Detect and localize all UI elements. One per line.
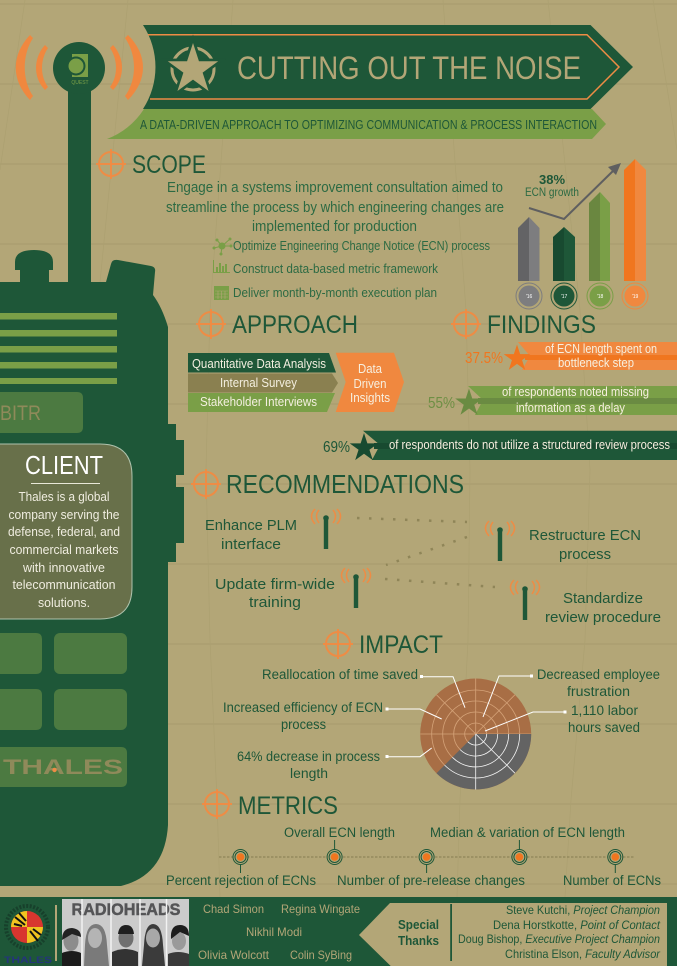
step: internal survey: Internal Survey [220, 375, 297, 390]
recommendation: standardize review [545, 590, 661, 626]
logo: University of Maryland [6, 906, 48, 948]
bar: 2017 [553, 227, 575, 281]
thanks list: Christina Elson, Faculty Advisor [505, 947, 661, 961]
recommendation: update training [215, 576, 335, 611]
label: labor hours: hours saved [568, 720, 640, 735]
heading: metrics: METRICS [238, 792, 338, 820]
recommendation: standardize review: review procedure [545, 609, 661, 626]
antenna head [53, 42, 105, 94]
team members: Olivia Wolcott [198, 948, 270, 962]
team members: Colin SyBing [290, 948, 352, 962]
team name: RADIOHEADS [72, 901, 180, 919]
bar: 2018 [589, 192, 610, 281]
icon: crosshair [202, 789, 232, 819]
growth label [525, 172, 579, 199]
finding: 55%: of respondents noted missing [502, 385, 649, 399]
panel: scope [96, 149, 504, 300]
finding: 37.5%: of ECN length spent on [545, 342, 657, 356]
thanks list: Dena Horstkotte, Point of Contact [493, 918, 661, 932]
panel: client [0, 444, 132, 619]
finding: 55%: information as a delay [516, 401, 626, 415]
thanks heading [398, 917, 439, 948]
title banner [143, 25, 633, 109]
bar: 2016 [518, 217, 540, 281]
banner shape [143, 25, 633, 109]
logo: Thales: THALES [4, 955, 52, 965]
logo: Quest: QUEST [71, 80, 89, 86]
bullet: execution plan: Deliver month-by-month execution plan [233, 286, 437, 300]
icon: antenna 3 [342, 568, 370, 608]
year badges: '18 [597, 294, 603, 300]
recommendation: standardize review: Standardize [563, 590, 643, 607]
year badges: '16 [526, 294, 532, 300]
growth label: ECN growth [525, 187, 579, 199]
metric labels [166, 825, 661, 888]
icon: network [213, 238, 232, 255]
heading: approach: APPROACH [232, 311, 358, 339]
step: stakeholder interviews: Stakeholder Interviews [200, 394, 317, 409]
chevron: data driven insights: Data [358, 361, 383, 376]
recommendation: restructure ECN [529, 527, 641, 563]
bullet: metric framework: Construct data-based metric framework [233, 262, 439, 276]
client heading: CLIENT [25, 450, 103, 480]
step: internal survey [188, 374, 338, 392]
icon: antenna 4 [510, 580, 540, 620]
icon: crosshair [451, 309, 481, 339]
heading: findings: FINDINGS [487, 311, 596, 339]
metric labels: Median & variation of ECN length [430, 825, 625, 840]
client description: defense, federal, and [8, 524, 120, 539]
finding: 37.5% [465, 342, 677, 370]
label: employee frustration: Decreased employee [537, 667, 660, 682]
label: reallocation: Reallocation of time saved [262, 667, 418, 682]
panel: recommendations [191, 469, 661, 626]
client description: solutions. [38, 595, 90, 610]
heading: recommendations: RECOMMENDATIONS [226, 471, 464, 499]
chevron: data driven insights: Driven [354, 376, 386, 391]
scope description [166, 180, 504, 235]
finding: 69%: 69% [323, 439, 350, 456]
finding: 69% [323, 431, 677, 460]
client description: commercial markets [10, 542, 119, 557]
recommendation: enhance PLM: Enhance PLM [205, 517, 297, 534]
keypad buttons [0, 633, 127, 730]
subtitle ribbon [107, 109, 606, 139]
icon: crosshair [196, 309, 226, 339]
label: process length: length [290, 766, 328, 781]
timeline [219, 840, 635, 873]
client description: telecommunication [12, 577, 116, 592]
icon: antenna 2 [486, 521, 514, 561]
finding: 37.5%: 37.5% [465, 350, 503, 367]
icon: crosshair [191, 469, 221, 499]
panel: metrics [166, 789, 661, 888]
scope description: Engage in a systems improvement consultation aimed to [167, 180, 503, 196]
radio illustration [0, 35, 184, 886]
arrow: growth trend [529, 163, 621, 219]
footer [0, 897, 677, 966]
icon: crosshair [96, 149, 126, 179]
metric labels: Overall ECN length [284, 825, 395, 840]
person 4 [142, 924, 165, 966]
team photo [62, 899, 189, 966]
client description [8, 489, 120, 610]
thanks list [458, 903, 661, 961]
leader dots [386, 674, 566, 758]
recommendation: enhance PLM: interface [221, 536, 281, 553]
label: employee frustration [537, 667, 660, 699]
icon: star [168, 43, 218, 91]
label: labor hours [568, 703, 640, 735]
display: BITR: BITR [0, 402, 41, 425]
thanks list: Steve Kutchi, Project Champion [506, 903, 660, 917]
chart: ECN growth [516, 159, 648, 309]
scope description: implemented for production [252, 219, 417, 235]
metric labels: Number of pre-release changes [337, 873, 525, 888]
heading: impact: IMPACT [359, 631, 443, 659]
panel: impact [223, 629, 660, 790]
thanks list: Doug Bishop, Executive Project Champion [458, 932, 660, 946]
label: efficiency: Increased efficiency of ECN [223, 700, 383, 715]
display: BITR [0, 392, 83, 433]
bar: 2019 [624, 159, 646, 281]
finding: 37.5%: bottleneck step [558, 356, 634, 370]
bullet: ECN process: Optimize Engineering Change Notice (ECN) process [233, 239, 490, 253]
client description: Thales is a global [18, 489, 110, 504]
recommendation: enhance PLM [205, 517, 297, 553]
chevron: data driven insights [336, 353, 404, 412]
team members: Nikhil Modi [246, 925, 302, 939]
recommendation: restructure ECN: process [559, 546, 611, 563]
team members: Chad Simon [203, 902, 264, 916]
signal arcs [16, 35, 143, 100]
metric labels: Percent rejection of ECNs [166, 873, 316, 888]
panel: approach [188, 309, 404, 412]
step: quantitative data analysis: Quantitative Data Analysis [192, 356, 326, 371]
year badges: '17 [561, 294, 567, 300]
team members: Regina Wingate [281, 902, 360, 916]
label: process length: 64% decrease in process [237, 749, 380, 764]
finding: 55% [428, 385, 677, 415]
person 1 [62, 928, 81, 966]
icon: bars [213, 260, 230, 273]
recommendation: update training: Update firm-wide [215, 576, 335, 593]
recommendation: update training: training [249, 594, 301, 611]
person 5 [168, 925, 189, 966]
finding: 55%: 55% [428, 395, 455, 412]
thanks heading: Thanks [398, 933, 439, 948]
label: labor hours: 1,110 labor [571, 703, 638, 718]
leader lines [387, 676, 565, 757]
footer band [0, 897, 677, 966]
icon: antenna 1 [312, 509, 340, 549]
person 2 [84, 924, 109, 966]
metric labels: Number of ECNs [563, 873, 661, 888]
person 3 [112, 925, 138, 966]
logo: Thales [0, 747, 127, 787]
title: CUTTING OUT THE NOISE [237, 50, 581, 86]
chevron: data driven insights: Insights [350, 390, 390, 405]
pie chart [420, 678, 531, 790]
logo: Thales: THALES [3, 756, 123, 779]
radio body [0, 90, 184, 886]
panel: findings [323, 309, 677, 460]
thanks heading: Special [398, 917, 439, 932]
team members [198, 902, 360, 962]
scope description: streamline the process by which engineering changes are [166, 200, 504, 216]
year badges [516, 283, 648, 309]
year badges: '19 [632, 294, 638, 300]
label: employee frustration: frustration [567, 684, 630, 699]
panel: special thanks [359, 903, 667, 966]
recommendation: restructure ECN: Restructure ECN [529, 527, 641, 544]
icon: crosshair [323, 629, 353, 659]
client description: company serving the [8, 507, 120, 522]
speaker grille [0, 313, 117, 384]
label: efficiency [223, 700, 383, 732]
heading: scope: SCOPE [132, 151, 206, 179]
logo: Quest [66, 54, 89, 86]
icon: calendar [214, 286, 229, 300]
growth label: 38% [539, 172, 565, 187]
label: efficiency: process [281, 717, 326, 732]
label: process length [237, 749, 380, 781]
client description: with innovative [22, 560, 105, 575]
